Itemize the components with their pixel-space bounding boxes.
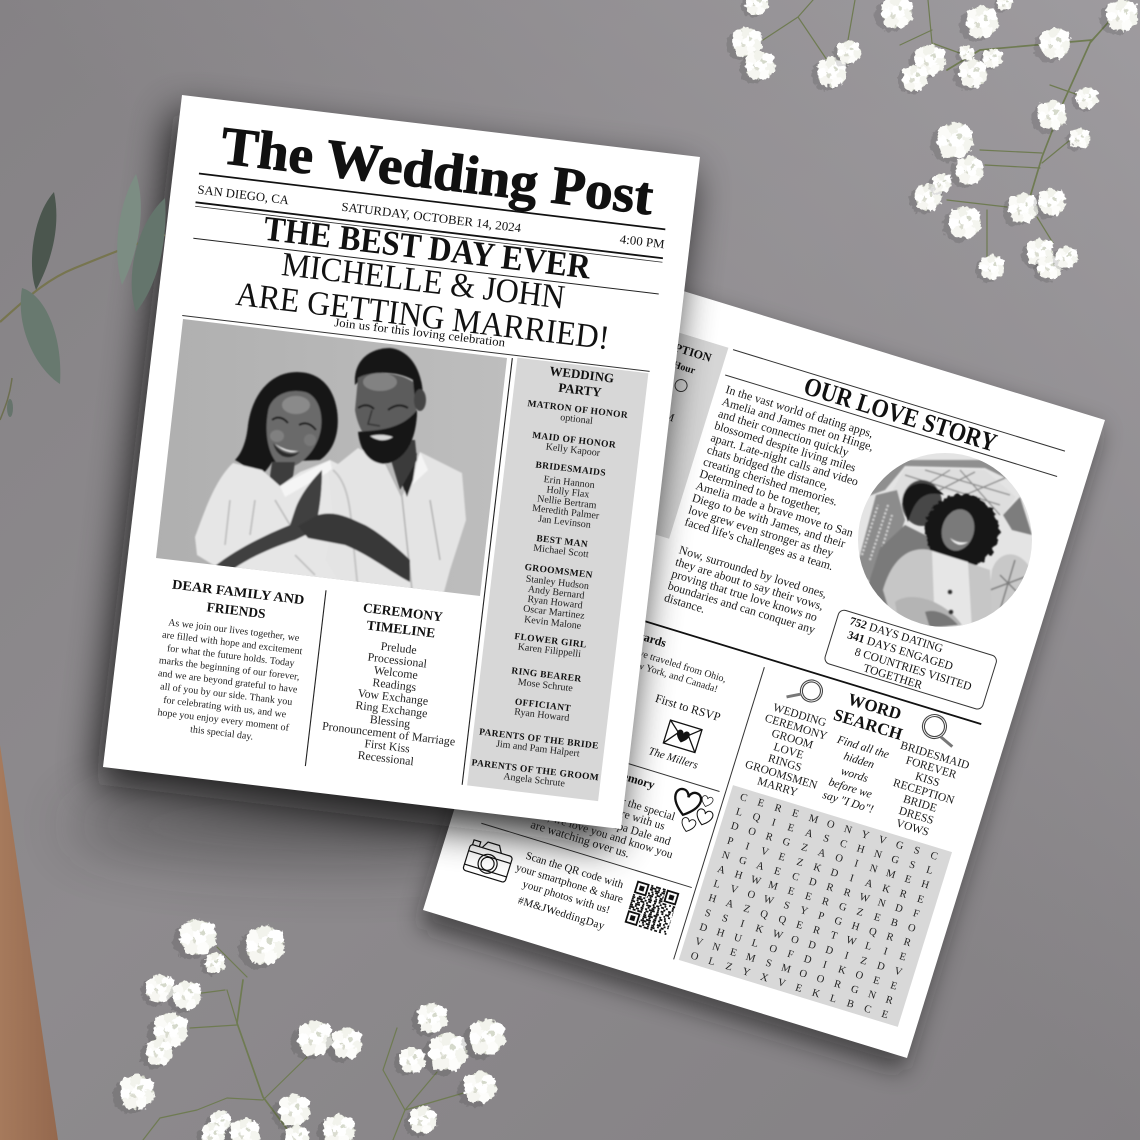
story text: Now, surrounded by loved ones, xyxy=(677,543,829,601)
panel: back sheet xyxy=(423,272,1105,1058)
in loving memory block: ones who can't be here with us xyxy=(528,780,667,833)
subheadline: getting married: ARE GETTING MARRIED! xyxy=(234,276,611,357)
photo: couple in circle xyxy=(858,453,1032,627)
sidebar: wedding party: GROOMSMEN xyxy=(524,563,593,581)
word search grid xyxy=(679,785,952,1027)
heading: word search: WORD xyxy=(846,690,904,724)
in loving memory block: Grandma Rose, we love you and know you xyxy=(481,792,674,861)
letter: dear family and friends: and we are beyond grateful to have xyxy=(157,668,299,696)
photo sharing text: #M&JWeddingDay xyxy=(516,895,606,932)
QR code xyxy=(624,880,680,935)
story text: and their connection quickly xyxy=(717,406,851,459)
icon: magnifier left xyxy=(787,674,825,707)
shadow of back sheet xyxy=(419,282,1101,1072)
word list left: LOVE xyxy=(772,741,805,762)
in loving memory block: are watching over us. xyxy=(529,817,631,860)
word search instructions: hidden xyxy=(842,751,876,771)
guest awards block: The Smiths have traveled from Ohio, xyxy=(582,631,727,685)
sidebar: wedding party: PARENTS OF THE GROOM xyxy=(471,758,600,784)
sidebar: wedding party: Angela Schrute xyxy=(503,771,566,790)
word list left: CEREMONY xyxy=(763,712,829,743)
word search grid: PIVEZKDIAKRE xyxy=(726,836,925,906)
sidebar: wedding party: Andy Bernard xyxy=(527,584,585,602)
sidebar: wedding party: MAID OF HONOR xyxy=(532,431,616,451)
word list right: RECEPTION xyxy=(892,777,956,807)
word search grid: LQIEASCHNGSL xyxy=(734,806,934,877)
word list right: BRIDESMAID xyxy=(899,740,971,772)
guest awards block: New York, and Canada! xyxy=(624,657,719,695)
kraft paper corner xyxy=(0,745,58,1140)
ceremony timeline: First Kiss xyxy=(364,736,411,756)
stats box: 8 COUNTRIES VISITED xyxy=(853,645,973,693)
letter: dear family and friends: DEAR FAMILY AND xyxy=(171,577,305,607)
story text: faced life's challenges as a team. xyxy=(683,515,835,573)
letter: dear family and friends: FRIENDS xyxy=(206,599,266,621)
story text: chats bridged the distance, xyxy=(705,442,830,493)
dateline: SATURDAY, OCTOBER 14, 2024 xyxy=(341,200,523,235)
guest awards block xyxy=(555,613,739,774)
ceremony timeline: TIMELINE xyxy=(366,617,436,641)
letter: dear family and friends xyxy=(151,576,309,747)
word list left: MARRY xyxy=(756,775,800,799)
sidebar: wedding party xyxy=(467,358,648,801)
sidebar: wedding party: Erin Hannon xyxy=(543,474,595,491)
story text: In the vast world of dating apps, xyxy=(724,382,875,440)
guest awards block: Guest Awards xyxy=(596,616,668,650)
stats box: TOGETHER xyxy=(862,662,924,692)
reception sidebar: RECEPTION xyxy=(641,331,714,365)
icon: hearts xyxy=(666,787,718,838)
dateline: SAN DIEGO, CA xyxy=(197,183,290,207)
ceremony timeline: Vow Exchange xyxy=(357,686,429,708)
photo sharing text: Scan the QR code with xyxy=(524,850,625,891)
word search grid: NGAECDRRWNDF xyxy=(720,850,921,920)
sidebar: wedding party: Kelly Kapoor xyxy=(545,442,601,459)
word search grid: LVOWSYPGHQRR xyxy=(712,879,913,950)
word list right: DRESS xyxy=(897,805,935,827)
stats box xyxy=(823,609,998,711)
shadow of front sheet xyxy=(95,112,692,846)
ceremony timeline: Welcome xyxy=(373,663,419,682)
word list left: GROOM xyxy=(770,727,814,751)
word list right: FOREVER xyxy=(904,755,958,781)
photo: wedding couple xyxy=(150,310,515,605)
word search grid: DORGZAOINMEH xyxy=(729,821,931,892)
word search instructions: Find all the xyxy=(835,734,890,761)
sidebar: wedding party: Meredith Palmer xyxy=(532,503,600,522)
ceremony timeline: Processional xyxy=(367,650,428,671)
subheadline: names: MICHELLE & JOHN xyxy=(280,246,567,317)
sidebar: wedding party: Ryan Howard xyxy=(527,594,583,611)
in loving memory block: especially Grandpa Dale and xyxy=(542,798,672,848)
photo sharing text: your smartphone & share xyxy=(514,862,625,906)
letter: dear family and friends: for what the future holds. Today xyxy=(166,643,295,669)
word search grid: HAZQQERTWLIE xyxy=(707,893,907,963)
word list right: KISS xyxy=(914,771,941,789)
sidebar: wedding party: FLOWER GIRL xyxy=(514,632,587,651)
sidebar: wedding party: Jim and Pam Halpert xyxy=(495,739,580,760)
sidebar: wedding party: BEST MAN xyxy=(536,534,588,550)
guest awards block: First to RSVP xyxy=(654,691,723,724)
word search grid: CEREMONYVGSC xyxy=(739,792,939,863)
dateline: 4:00 PM xyxy=(619,232,665,251)
story text: creating cherished memories. xyxy=(702,454,839,509)
sidebar: wedding party: Nellie Bertram xyxy=(537,493,597,511)
sidebar: wedding party: Oscar Martinez xyxy=(523,603,586,622)
letter: dear family and friends: for celebrating with us, and we xyxy=(163,695,287,720)
heading: our love story xyxy=(725,348,1065,477)
icon: camera xyxy=(463,837,515,883)
word list left: GROOMSMEN xyxy=(744,759,819,792)
sidebar: wedding party: MATRON OF HONOR xyxy=(527,399,628,421)
story text: boundaries and can conquer any xyxy=(666,578,817,637)
sidebar: wedding party: PARTY xyxy=(558,380,603,400)
letter: dear family and friends: As we join our lives together, we xyxy=(168,617,300,644)
story text: Determined to be together, xyxy=(698,466,824,517)
in loving memory block xyxy=(477,732,693,873)
sidebar: wedding party: Kevin Malone xyxy=(523,614,582,632)
story text: distance. xyxy=(663,590,707,616)
photo sharing text xyxy=(505,848,629,935)
sidebar: wedding party: Mose Schrute xyxy=(517,677,574,694)
letter: dear family and friends: are filled with hope and excitement xyxy=(162,630,303,657)
sidebar: wedding party: Karen Filippelli xyxy=(517,642,582,660)
sidebar: wedding party: OFFICIANT xyxy=(514,698,572,714)
heading: word search: SEARCH xyxy=(831,705,905,744)
reception sidebar: Cocktail Hour xyxy=(635,348,697,377)
ceremony timeline: Readings xyxy=(372,675,417,694)
story text: Amelia made a brave move to San xyxy=(694,478,855,540)
icon: envelope xyxy=(663,720,702,753)
sidebar: wedding party: Holly Flax xyxy=(546,484,590,501)
letter: dear family and friends: this special day. xyxy=(190,724,254,743)
word search instructions: words xyxy=(839,765,870,785)
word list left: RINGS xyxy=(766,753,803,774)
word search grid: DHULOFDIKOEE xyxy=(698,922,898,993)
sidebar: wedding party: Michael Scott xyxy=(533,543,590,560)
story text xyxy=(660,382,885,651)
story text: Diego to be with James, and their xyxy=(690,490,847,550)
story text: apart. Late-night calls and video xyxy=(709,430,860,489)
headline: THE BEST DAY EVER xyxy=(262,209,593,287)
eucalyptus sprig xyxy=(0,174,166,420)
sidebar: wedding party: Ryan Howard xyxy=(514,707,570,724)
sidebar: wedding party: Stanley Hudson xyxy=(525,574,590,592)
sidebar: wedding party: BRIDESMAIDS xyxy=(535,460,606,479)
ceremony timeline: Ring Exchange xyxy=(355,698,428,720)
word search grid: VNEMSMOORGNR xyxy=(694,936,895,1007)
stats box: 752 DAYS DATING xyxy=(848,614,945,655)
word search instructions: before we xyxy=(827,776,873,801)
dateline xyxy=(197,182,665,252)
flowers: bottom-left baby's breath xyxy=(113,919,505,1140)
story text: Amelia and James met on Hinge, xyxy=(720,394,875,454)
ceremony timeline: Pronouncement of Marriage xyxy=(321,719,456,748)
word search grid: OLZYXVEKLBCE xyxy=(689,950,889,1021)
reception sidebar xyxy=(569,317,728,539)
word list left xyxy=(740,699,838,804)
ceremony timeline xyxy=(318,597,470,773)
in loving memory block: In Loving Memory xyxy=(559,750,657,792)
ceremony timeline: CEREMONY xyxy=(362,600,444,624)
sidebar: wedding party: Jan Levinson xyxy=(538,514,591,531)
word list left: WEDDING xyxy=(772,702,828,729)
word list right: BRIDE xyxy=(902,793,938,815)
ceremony timeline: Blessing xyxy=(369,712,411,731)
panel: front sheet xyxy=(103,95,700,829)
in loving memory block: Today we honor the special xyxy=(552,775,677,823)
story text: love grew even stronger as they xyxy=(687,502,835,560)
word search instructions xyxy=(818,734,892,816)
word list right xyxy=(876,740,971,844)
story text: blossomed despite living miles xyxy=(713,418,858,475)
guest awards block: The Millers xyxy=(647,745,699,772)
ceremony timeline: Prelude xyxy=(380,639,417,657)
photo sharing text: your photos with us! xyxy=(521,878,611,916)
reception sidebar: 6:00 PM xyxy=(636,402,676,425)
sidebar: wedding party: optional xyxy=(560,412,594,427)
sidebar: wedding party: RING BEARER xyxy=(511,666,582,685)
story text: proving that true love knows no xyxy=(670,566,819,624)
icon: magnifier right xyxy=(919,712,960,747)
heading: our love story: OUR LOVE STORY xyxy=(800,371,1001,458)
stats box: 341 DAYS ENGAGED xyxy=(846,628,955,673)
heading: word search xyxy=(831,687,910,744)
sidebar: wedding party: PARENTS OF THE BRIDE xyxy=(479,728,599,752)
letter: dear family and friends: hope you enjoy every moment of xyxy=(157,707,290,734)
ceremony timeline: Recessional xyxy=(357,748,415,768)
letter: dear family and friends: all of you by our side. Thank you xyxy=(160,681,293,708)
column divider xyxy=(305,590,326,766)
sidebar: wedding party: WEDDING xyxy=(549,363,615,386)
flowers: top-right baby's breath xyxy=(726,0,1138,282)
masthead title: The Wedding Post xyxy=(218,115,657,226)
word search grid: AHWMEERGZEBO xyxy=(716,864,917,935)
word list right: VOWS xyxy=(894,817,930,839)
word search instructions: say "I Do"! xyxy=(821,789,875,816)
tagline: Join us for this loving celebration xyxy=(334,315,506,349)
letter: dear family and friends: marks the beginning of our forever, xyxy=(158,655,300,683)
story text: they are about to say their vows, xyxy=(674,554,825,613)
word search grid: SSIKWODDIZDV xyxy=(703,908,904,979)
